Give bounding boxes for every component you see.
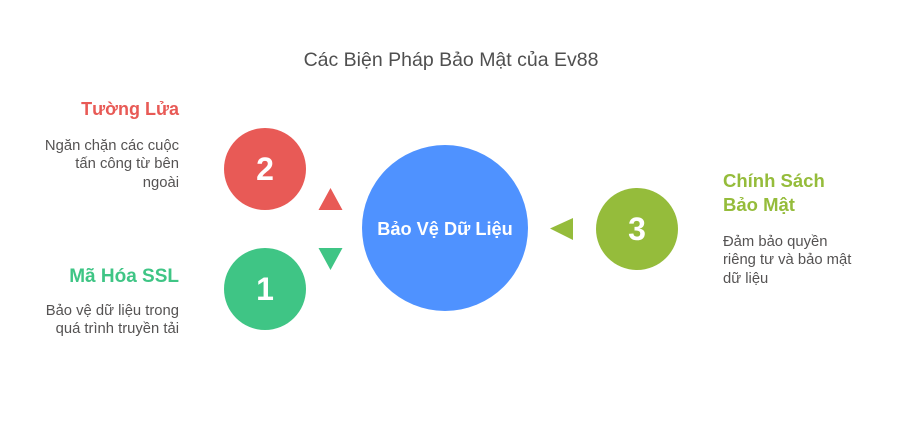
text: Tường Lửa description: Ngăn chặn các cuộc — [45, 138, 179, 154]
text: Chính Sách Bảo Mật description: dữ liệu — [723, 271, 768, 287]
arrow: red up — [318, 188, 342, 210]
title: Các Biện Pháp Bảo Mật của Ev88 — [304, 49, 598, 71]
heading: Chính Sách Bảo Mật: Bảo Mật — [723, 194, 795, 215]
text: Tường Lửa description: ngoài — [143, 175, 179, 191]
text: Chính Sách Bảo Mật description: riêng tư và bảo mật — [723, 252, 851, 268]
circle 1 — [224, 248, 306, 330]
arrow: olive left — [550, 218, 573, 240]
text: Mã Hóa SSL description: quá trình truyền tải — [56, 321, 179, 337]
heading: Chính Sách Bảo Mật: Chính Sách — [723, 170, 825, 191]
heading: Chính Sách Bảo Mật — [723, 170, 825, 215]
text: Chính Sách Bảo Mật description — [723, 234, 852, 287]
circle 2 — [224, 128, 306, 210]
text: Chính Sách Bảo Mật description: Đảm bảo quyền — [723, 234, 827, 250]
text: Mã Hóa SSL description: Bảo vệ dữ liệu trong — [46, 303, 179, 319]
central circle: Bảo Vệ Dữ Liệu — [362, 145, 528, 311]
circle 1: 1 — [256, 271, 274, 307]
circle 3 — [596, 188, 678, 270]
arrow: green down — [318, 248, 342, 270]
text: Tường Lửa description — [45, 138, 179, 191]
text: Mã Hóa SSL description — [46, 303, 179, 337]
text: Tường Lửa description: tấn công từ bên — [75, 156, 179, 172]
central circle: Bảo Vệ Dữ Liệu: Bảo Vệ Dữ Liệu — [377, 219, 513, 239]
circle 2: 2 — [256, 151, 274, 187]
heading: Tường Lửa: Tường Lửa — [81, 99, 179, 119]
heading: Mã Hóa SSL: Mã Hóa SSL — [69, 266, 179, 287]
circle 3: 3 — [628, 211, 646, 247]
